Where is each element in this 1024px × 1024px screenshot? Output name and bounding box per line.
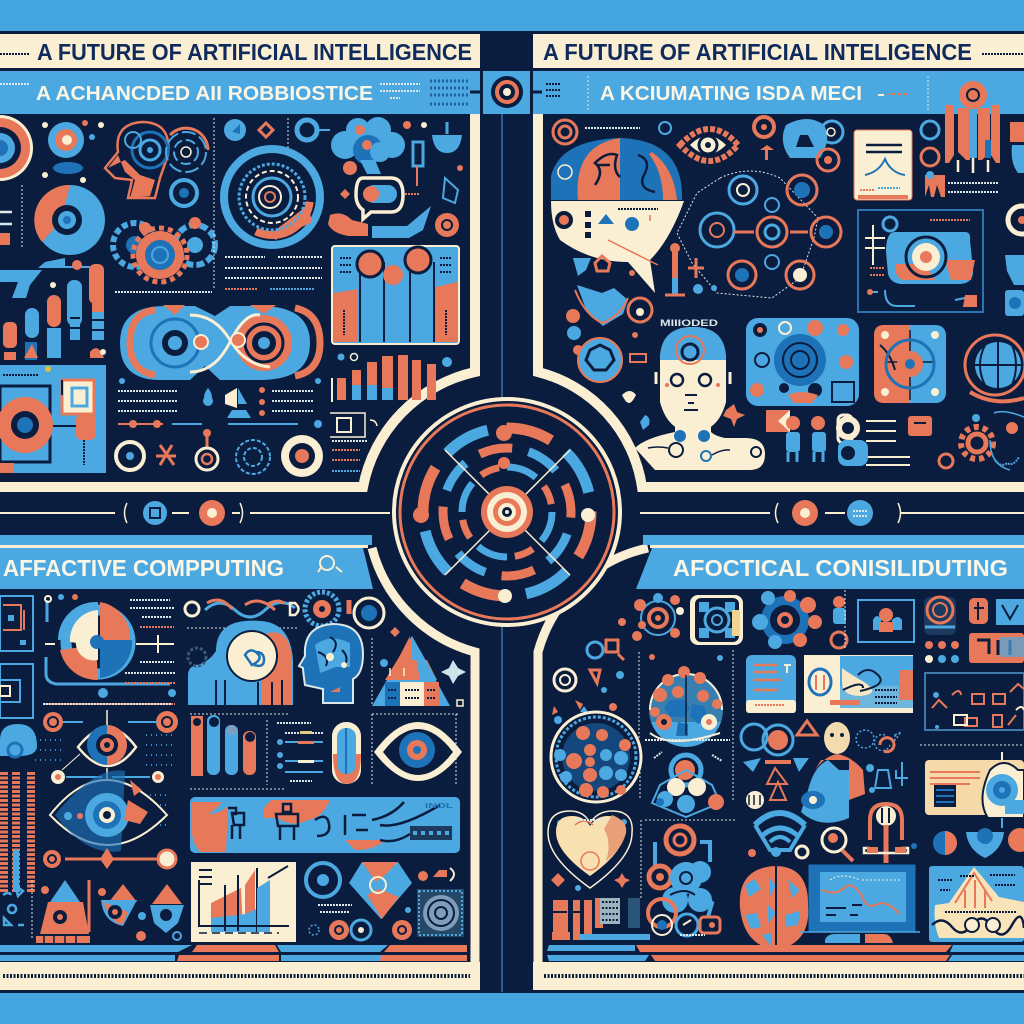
subtitle bar: top left: A ACHANCDED AII ROBBIOSTICE [36, 83, 373, 105]
icon: scattered dots cluster [552, 593, 684, 760]
icon: gears tree [648, 826, 720, 936]
header: affective computing: AFFACTIVE COMPPUTING [3, 555, 284, 581]
card: gear, text rows, dashes [836, 412, 1024, 470]
icon: spiral and ring [166, 128, 208, 206]
illustration: robot face [635, 318, 765, 470]
header: affective computing [0, 535, 373, 589]
horizontal timeline left [0, 500, 390, 526]
icon: pin, cross and dots [629, 243, 717, 295]
icon: globe [965, 335, 1024, 401]
panel: affective computing icons [0, 592, 467, 961]
horizontal timeline right [640, 500, 1024, 526]
icon: speech bubble with brain [551, 138, 684, 293]
banner: figures on marbled band: INOL [425, 803, 454, 810]
icon: large radial dial [214, 118, 330, 290]
card: camera swirl [746, 318, 859, 406]
icon: infinity loop [120, 305, 320, 380]
icons: people [622, 391, 826, 462]
icons: person and trio [741, 721, 908, 823]
icon: globe badge [578, 332, 646, 382]
icon: brain dome [645, 650, 733, 800]
card: camera [925, 752, 1024, 858]
footer stripes right [547, 945, 1024, 961]
panel: top right icons [551, 81, 1024, 470]
icon: pawn chain and photo frame [831, 590, 914, 650]
icon: large eye [43, 770, 176, 869]
icon: eye schematic top [35, 704, 178, 825]
icon: keyhole brain pillar [864, 804, 917, 863]
card: machine schematic [858, 210, 983, 312]
central radial diagram [394, 399, 620, 625]
icon: swirling cell [752, 590, 822, 649]
text rows and icons under loop [116, 378, 323, 477]
title bar: top right: A FUTURE OF ARTIFICIAL INTELIGENCE [543, 39, 972, 65]
subtitle bar: top right [533, 71, 1024, 114]
banner: figures on marbled band [190, 797, 460, 853]
bar columns [190, 714, 288, 789]
subtitle bar: top left [0, 71, 480, 114]
card: puzzle gear [690, 595, 743, 645]
cream note card [854, 130, 912, 200]
icon: mask and rings [754, 117, 843, 171]
icon: small ring and dots [42, 120, 104, 183]
icon: patterned eye [659, 122, 738, 161]
icon: rocket tower [921, 81, 1000, 197]
card: gauge module [874, 325, 946, 403]
icon: head profile [105, 122, 168, 198]
icon: network of rings [677, 171, 841, 298]
icon: shield emblem [566, 256, 652, 355]
panel: afoctical consiliduting icons [547, 590, 1024, 961]
card: blue notes [746, 655, 796, 713]
icon: triangular node tree [640, 752, 735, 820]
title bar: top left: A FUTURE OF ARTIFICIAL INTELLIGENCE [37, 39, 472, 65]
donut chart [45, 594, 176, 704]
header: afoctical consiliduting [636, 535, 1024, 589]
header: afoctical consiliduting: AFOCTICAL CONISILIDUTING [673, 555, 1008, 581]
card: analysis screen [804, 655, 913, 713]
icon: blue brain [331, 117, 427, 175]
pie chart [0, 185, 105, 255]
icon: heart [548, 811, 632, 891]
icons: gem, rings, radar [306, 862, 464, 940]
footer stripes left [0, 945, 467, 961]
icon: chain rings row [185, 592, 384, 628]
icon: cell dish [551, 712, 641, 802]
icon: magnifier [822, 828, 853, 861]
text lines under dial [225, 257, 322, 289]
title bar: top right [533, 34, 1024, 68]
icon: pyramid [372, 627, 466, 706]
column chart lower right [330, 354, 452, 471]
icon: gun-shaped device and pills [0, 258, 106, 360]
card: line chart dark [920, 673, 1024, 745]
card: monitor line chart [800, 866, 920, 943]
monitor chart [191, 862, 296, 942]
icon: wifi [748, 813, 808, 858]
legend rows with pill [277, 714, 372, 784]
bar chart card [332, 246, 459, 344]
icons: bars and QR [552, 820, 650, 940]
icon: gears cluster [113, 217, 215, 292]
icon: flask and hands [328, 122, 463, 238]
icon: head profile network [299, 624, 363, 703]
icon: patched brain [740, 866, 808, 950]
illustration: blue arch head [188, 621, 293, 705]
icon: spiral badge [553, 120, 640, 144]
icon: right edge bot [1005, 122, 1024, 316]
panel: advanced AI robotics icons [0, 115, 463, 477]
icon: cream eye [372, 714, 462, 784]
center top connector tile [470, 71, 542, 114]
subtitle bar: top right: A KCIUMATING ISDA MECI [600, 83, 862, 105]
icon: spiral & grids top right [924, 597, 1024, 663]
illustration: robot face: MIIIODED [660, 318, 719, 328]
icons: shapes row bottom [3, 880, 184, 943]
icon: target ring at left edge [0, 115, 33, 181]
card: circuit squares [0, 596, 37, 892]
card: control diagram [0, 365, 106, 473]
title bar: top left [0, 34, 480, 68]
card: mountain chart [929, 866, 1024, 942]
